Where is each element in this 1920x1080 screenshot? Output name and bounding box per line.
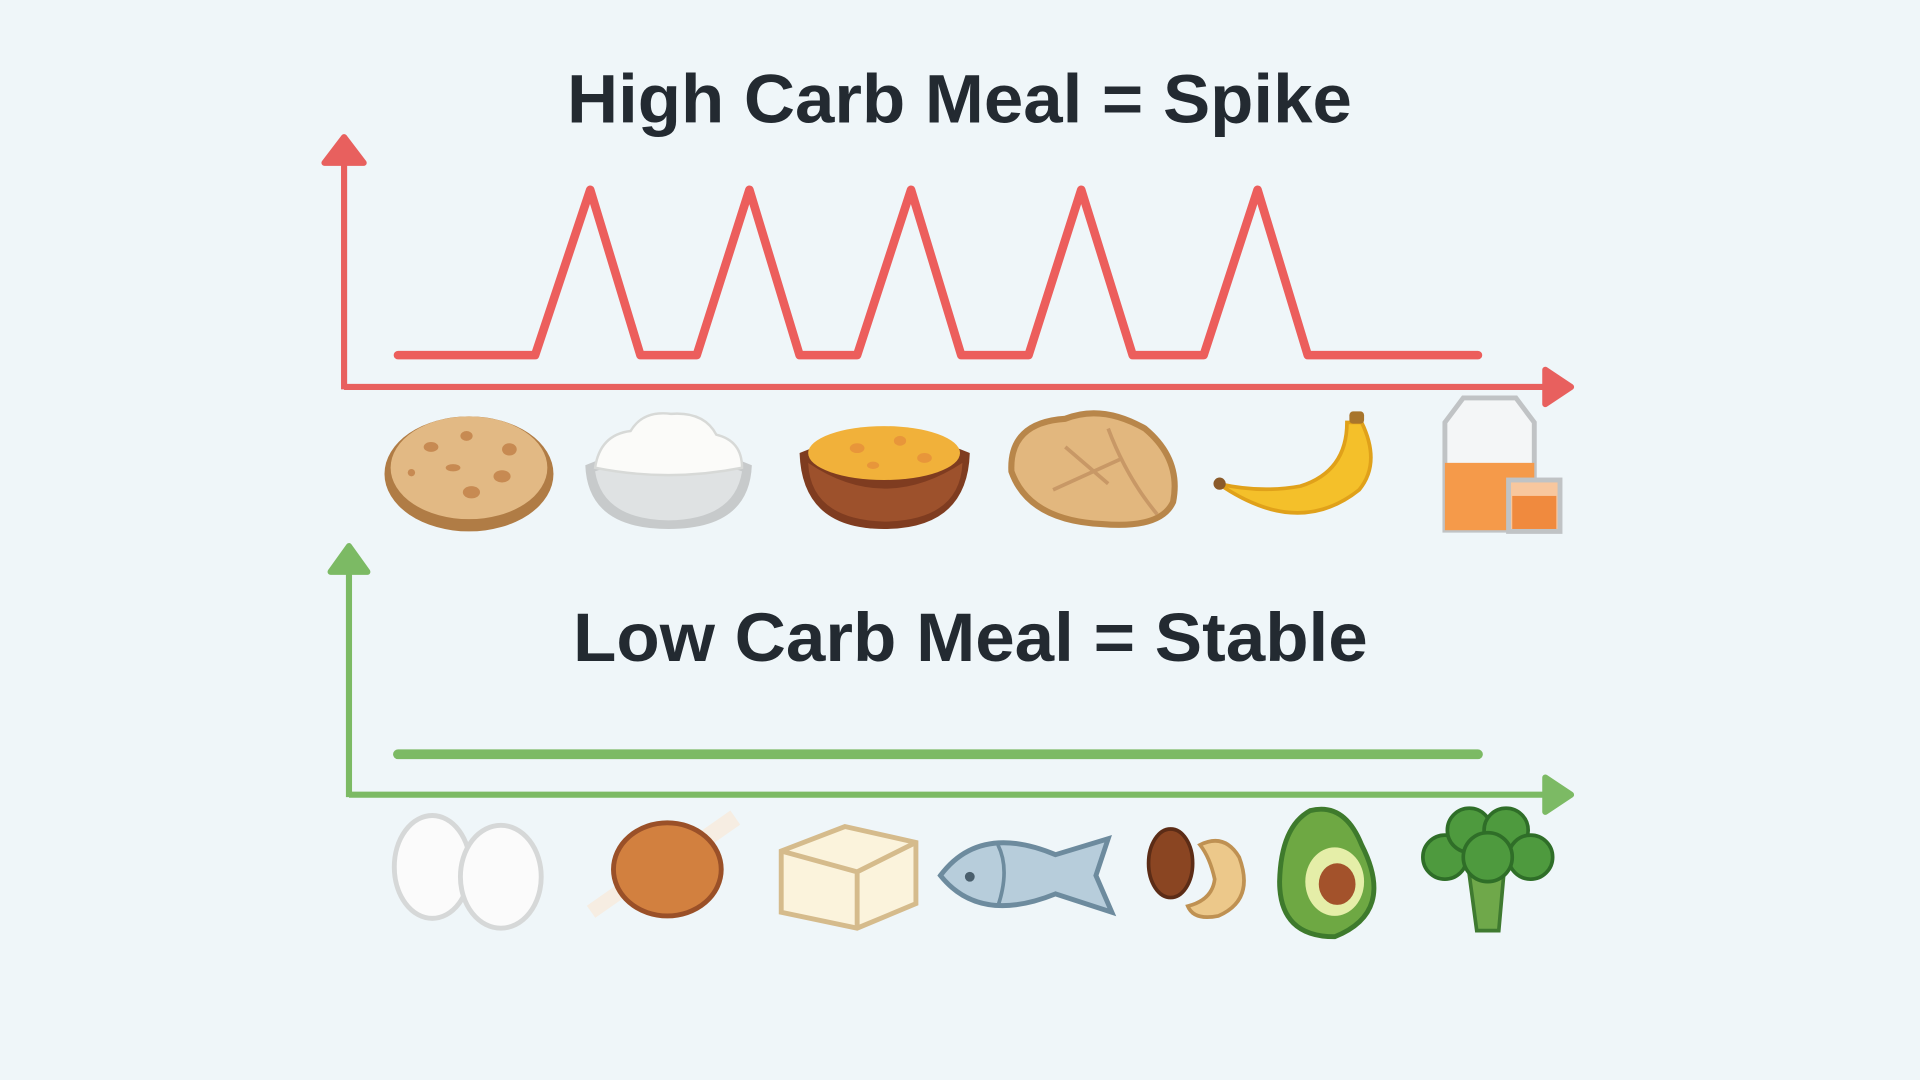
icon: soup bowl bbox=[800, 426, 970, 529]
icon: tofu bbox=[781, 827, 916, 928]
chart: spike line bbox=[398, 190, 1478, 355]
icon: banana bbox=[1213, 411, 1371, 513]
title: high carb: High Carb Meal = Spike bbox=[567, 60, 1352, 137]
icon: fish bbox=[940, 839, 1112, 912]
icon: chicken leg bbox=[587, 811, 740, 918]
chart: stable line bbox=[398, 750, 1478, 758]
icon: avocado bbox=[1280, 809, 1374, 937]
chart: high carb axes bbox=[324, 137, 1571, 404]
icon: nuts bbox=[1149, 829, 1244, 917]
icon: tortilla bbox=[384, 416, 553, 531]
chart: low carb axes bbox=[331, 546, 1571, 812]
icons: low carb foods bbox=[394, 808, 1553, 937]
icon: bread bbox=[1011, 413, 1175, 525]
icon: rice bowl bbox=[585, 413, 752, 529]
icons: high carb foods bbox=[384, 398, 1560, 531]
icon: broccoli bbox=[1423, 808, 1553, 931]
icon: eggs bbox=[394, 816, 541, 928]
title: low carb: Low Carb Meal = Stable bbox=[573, 599, 1368, 676]
icon: juice bbox=[1445, 398, 1560, 531]
